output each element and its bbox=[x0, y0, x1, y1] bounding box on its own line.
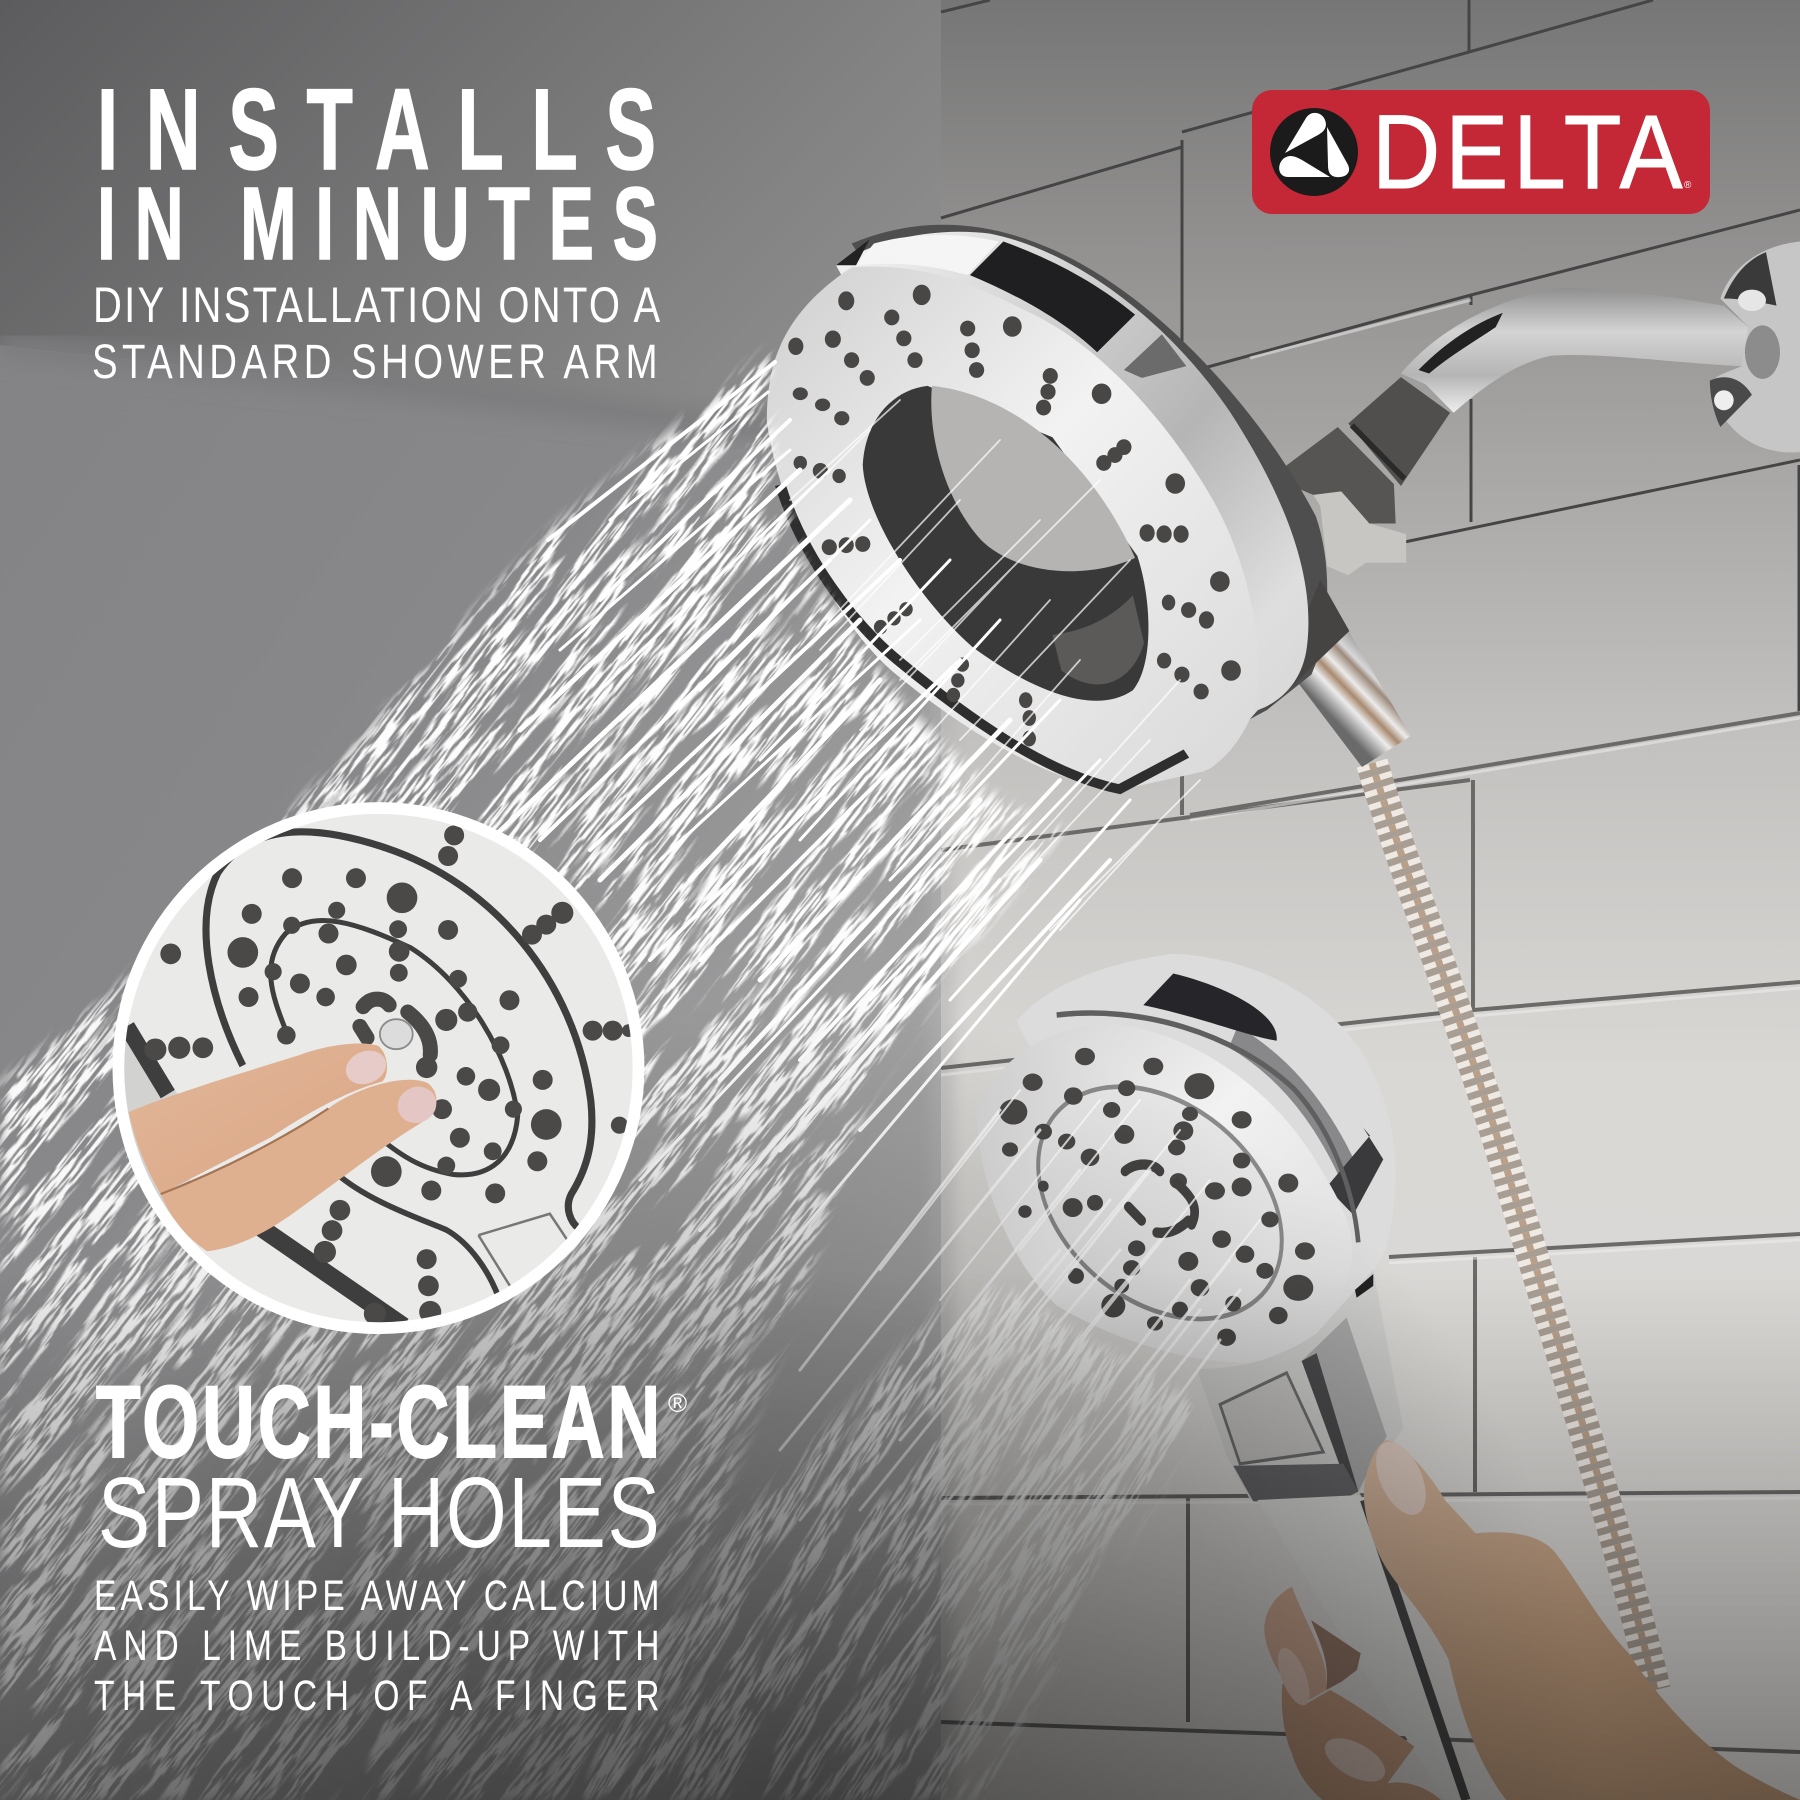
lower handle bbox=[1257, 1495, 1468, 1800]
fitting collar bbox=[1348, 377, 1450, 486]
white ring bbox=[112, 802, 644, 1334]
lower nail bbox=[398, 1086, 436, 1123]
thumb nail bbox=[1366, 1436, 1436, 1521]
body text: easily wipe away: EASILY WIPE AWAY CALCIUM bbox=[94, 1572, 659, 1620]
heading: touch-clean spray holes bbox=[96, 1365, 687, 1569]
second fingernail bbox=[1271, 1645, 1316, 1708]
centre jets bbox=[360, 999, 430, 1055]
lower fingers bbox=[1282, 1683, 1441, 1800]
body text: easily wipe away: AND LIME BUILD-UP WITH bbox=[94, 1622, 659, 1670]
thumb and palm bbox=[1364, 1440, 1800, 1800]
hand shower jets bbox=[760, 1090, 1260, 1720]
registered mark: ® bbox=[1684, 180, 1692, 191]
back shell bbox=[852, 225, 1327, 754]
logo mark bbox=[1270, 108, 1358, 196]
chrome body bbox=[1017, 954, 1396, 1333]
Delta logo bbox=[1252, 90, 1710, 214]
upper nail bbox=[346, 1050, 386, 1084]
lower finger bbox=[161, 1080, 436, 1251]
subheading: DIY installation bbox=[92, 277, 661, 389]
index finger bbox=[1264, 1587, 1327, 1703]
nozzle holes bbox=[144, 825, 635, 1325]
recess bbox=[863, 386, 1148, 701]
heading: installs in minutes bbox=[97, 65, 658, 281]
hand shower spray texture bbox=[565, 1287, 1193, 1800]
hand holding shower bbox=[1264, 1436, 1800, 1800]
mount tab bbox=[1313, 491, 1406, 575]
heading: touch-clean spray holes: SPRAY HOLES bbox=[98, 1458, 660, 1569]
spray face bbox=[977, 1023, 1353, 1363]
heading: installs in minutes: IN MINUTES bbox=[97, 167, 658, 281]
main water spray texture bbox=[0, 350, 1068, 1800]
main spray jets bbox=[480, 362, 1200, 1280]
inset: touch-clean close-up bbox=[100, 780, 660, 1340]
spray holes bbox=[999, 1048, 1315, 1346]
fingernail bbox=[1316, 1730, 1394, 1790]
heading: touch-clean spray holes: ® bbox=[668, 1388, 687, 1418]
shower arm bbox=[1271, 241, 1800, 523]
centre jets bbox=[1125, 1165, 1195, 1233]
hose connector bbox=[1296, 630, 1411, 767]
spray holes bbox=[788, 285, 1241, 746]
braided hose bbox=[1372, 763, 1655, 1690]
hand shower head bbox=[977, 954, 1403, 1501]
subheading: DIY installation: STANDARD SHOWER ARM bbox=[92, 336, 658, 389]
fitting nut bbox=[1271, 427, 1396, 523]
body text: easily wipe away bbox=[94, 1572, 660, 1720]
heading: installs in minutes: INSTALLS bbox=[97, 65, 656, 194]
body text: easily wipe away: THE TOUCH OF A FINGER bbox=[94, 1672, 659, 1720]
centre button bbox=[380, 1019, 413, 1049]
upper finger bbox=[129, 1044, 387, 1194]
spray face bbox=[767, 267, 1259, 789]
finger shadow bbox=[1311, 1620, 1361, 1690]
bracket bbox=[1267, 580, 1349, 710]
chrome rim bbox=[836, 232, 1308, 789]
close-up contents bbox=[124, 814, 632, 1322]
heading: touch-clean spray holes: TOUCH-CLEAN bbox=[96, 1365, 660, 1479]
subheading: DIY installation: DIY INSTALLATION ONTO A bbox=[93, 277, 661, 333]
tiled shower wall bbox=[930, 0, 1800, 1800]
finger crease bbox=[161, 1108, 328, 1194]
bottom shading bbox=[0, 1000, 1800, 1800]
wordmark: DELTA bbox=[1372, 94, 1683, 211]
main shower head bbox=[767, 225, 1349, 789]
handle bbox=[1197, 1270, 1403, 1501]
